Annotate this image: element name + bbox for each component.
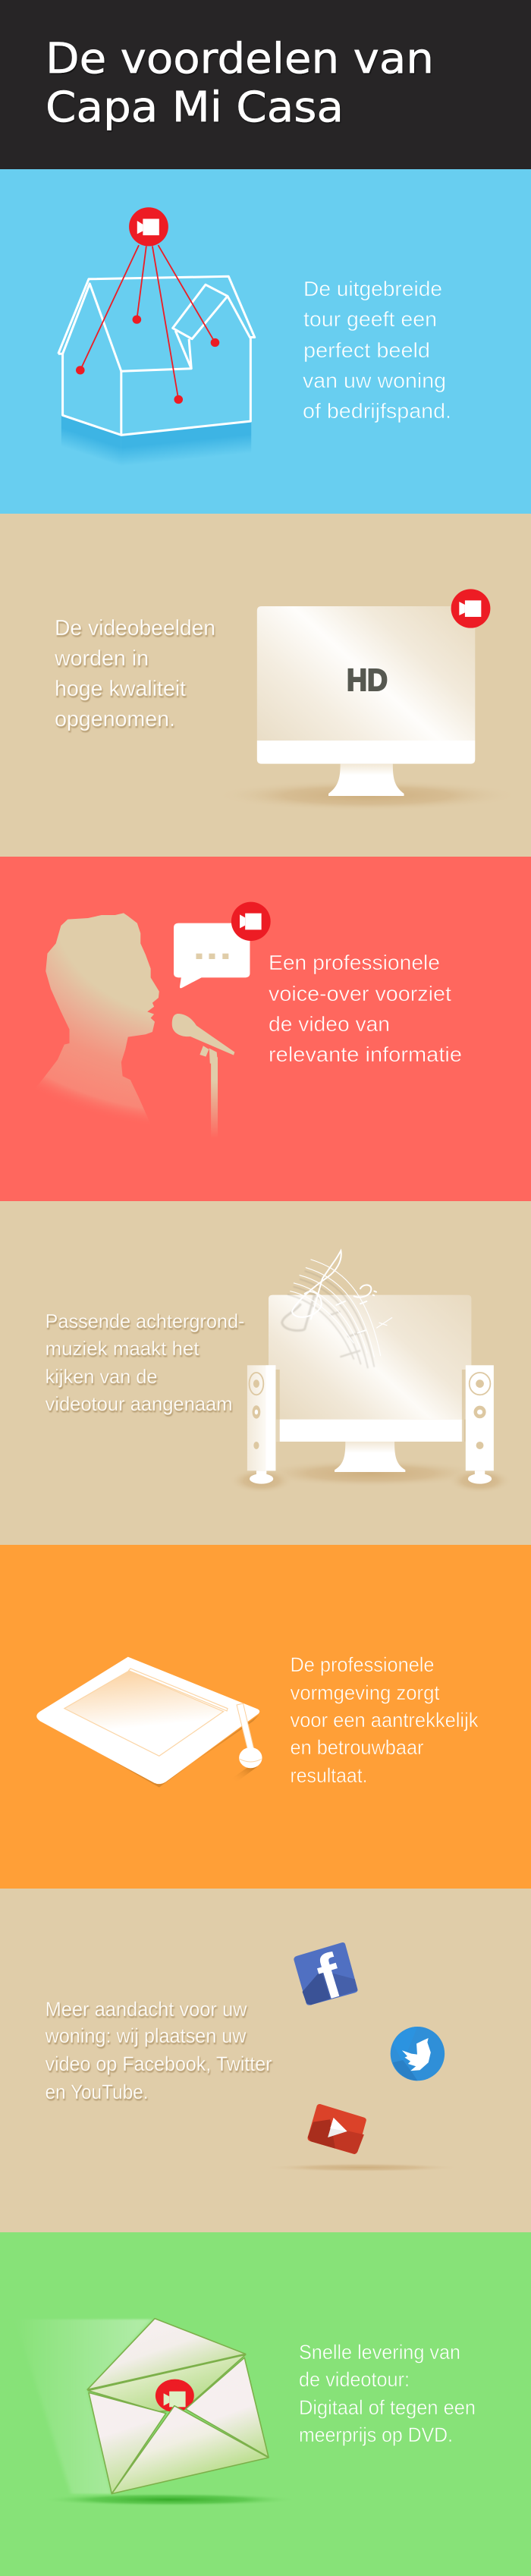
- panel: design: [0, 1545, 531, 1889]
- text: HD: [54, 616, 215, 731]
- text: music: kijken van de: [46, 1365, 158, 1388]
- panel: social media: [0, 1889, 531, 2232]
- panel: voice-over: [0, 857, 531, 1201]
- text: voice-over: [269, 951, 462, 1066]
- icon: drawing tablet with pen: [36, 1657, 262, 1788]
- icon: twitter: [391, 2027, 445, 2081]
- text: music: Passende achtergrond-: [46, 1310, 244, 1332]
- shadow under icons: [264, 2163, 460, 2172]
- text: voice-over: voice-over voorziet: [269, 982, 451, 1005]
- icon: flying envelope: [15, 2319, 298, 2506]
- text: design: De professionele: [290, 1653, 434, 1676]
- text: social media: woning: wij plaatsen uw: [45, 2024, 247, 2047]
- icon: HD monitor: [215, 589, 520, 811]
- panel: header: [0, 0, 531, 169]
- icon: youtube: [308, 2104, 366, 2154]
- text: HD: De videobeelden: [55, 616, 215, 640]
- text: delivery: Digitaal of tegen een: [299, 2396, 476, 2419]
- text: tour: van uw woning: [303, 369, 446, 392]
- text: HD: worden in: [54, 646, 149, 671]
- text: delivery: [299, 2341, 476, 2446]
- icon: facebook: f: [309, 1941, 350, 2013]
- text: music: videotour aangenaam: [46, 1392, 232, 1415]
- text: voice-over: Een professionele: [269, 951, 440, 974]
- text: social media: [45, 1998, 272, 2103]
- text: tour: [303, 277, 451, 423]
- text: social media: Meer aandacht voor uw: [46, 1998, 247, 2021]
- text: design: en betrouwbaar: [290, 1736, 423, 1759]
- text: design: voor een aantrekkelijk: [290, 1709, 479, 1731]
- icon: house with camera: [58, 207, 255, 467]
- text: tour: perfect beeld: [303, 338, 430, 362]
- text: voice-over: de video van: [269, 1012, 390, 1036]
- icon: HD monitor: HD: [347, 662, 388, 697]
- text: delivery: de videotour:: [299, 2368, 410, 2391]
- panel: music: [0, 1201, 531, 1545]
- text: design: resultaat.: [290, 1764, 367, 1787]
- title: De voordelen van: [46, 34, 434, 83]
- text: music: [46, 1310, 244, 1415]
- text: tour: tour geeft een: [303, 307, 437, 331]
- icon: facebook: [294, 1941, 358, 2013]
- title: Capa Mi Casa: [46, 83, 344, 131]
- panel: tour: [0, 169, 531, 514]
- text: social media: video op Facebook, Twitter: [46, 2052, 272, 2075]
- text: delivery: Snelle levering van: [299, 2341, 460, 2364]
- text: design: [290, 1653, 479, 1787]
- title: [46, 34, 434, 131]
- text: voice-over: relevante informatie: [269, 1043, 462, 1066]
- panel: delivery: [0, 2232, 531, 2576]
- text: HD: opgenomen.: [55, 707, 175, 731]
- text: tour: De uitgebreide: [303, 277, 442, 300]
- text: HD: hoge kwaliteit: [55, 677, 186, 701]
- icon: monitor with speakers and music notes: [229, 1250, 512, 1493]
- text: delivery: meerprijs op DVD.: [299, 2423, 453, 2446]
- text: design: vormgeving zorgt: [290, 1681, 440, 1704]
- text: music: muziek maakt het: [46, 1337, 200, 1360]
- text: social media: en YouTube.: [46, 2081, 149, 2103]
- icon: speaker silhouette with microphone and bubble: [34, 902, 271, 1142]
- panel: HD: [0, 514, 531, 857]
- text: tour: of bedrijfspand.: [303, 399, 451, 423]
